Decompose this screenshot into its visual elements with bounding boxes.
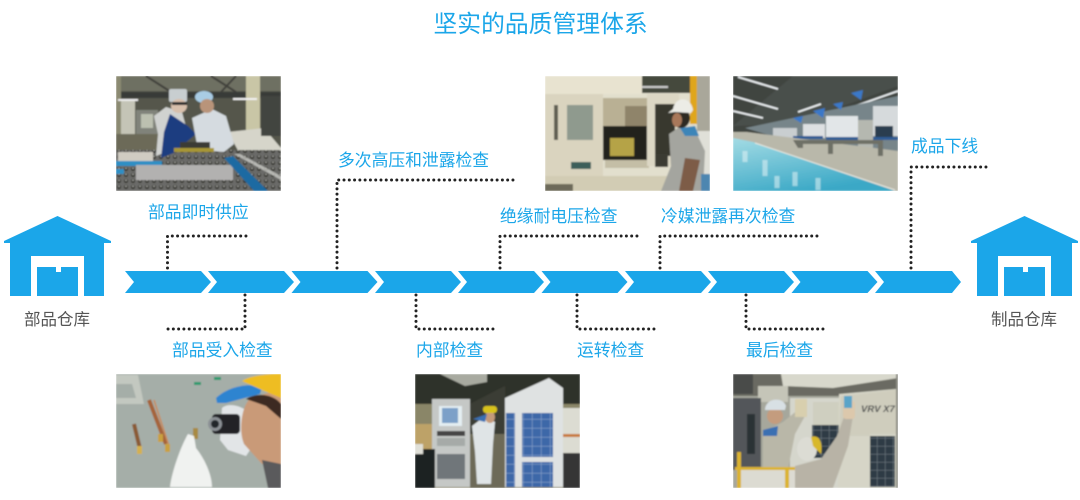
label: finished goods warehouse: 制品仓库 (991, 310, 1057, 329)
photo: production line (733, 76, 898, 191)
connector: finished product (911, 167, 986, 268)
connector: insulation voltage inspection (500, 236, 637, 268)
connector: parts incoming inspection (168, 295, 245, 329)
connector: parts supply (168, 236, 246, 268)
label: final inspection: 最后检查 (746, 341, 813, 360)
connector: internal inspection (416, 295, 493, 329)
icon: parts warehouse (4, 216, 111, 296)
label: running inspection: 运转检查 (577, 341, 644, 360)
label: insulation voltage inspection: 绝缘耐电压检查 (500, 207, 618, 226)
process arrow chain (125, 271, 961, 293)
label: parts warehouse: 部品仓库 (24, 310, 90, 329)
connector: running inspection (577, 295, 654, 329)
title: 坚实的品质管理体系 (434, 11, 648, 38)
label: parts incoming inspection: 部品受入检查 (172, 341, 273, 360)
photo: parts inspection (116, 374, 281, 488)
icon: finished goods warehouse (971, 216, 1078, 296)
label: parts supply: 部品即时供应 (148, 203, 249, 222)
connector: final inspection (746, 295, 823, 329)
label: refrigerant leak re-inspection: 冷媒泄露再次检查 (661, 207, 795, 226)
connector: high pressure and leak inspection (337, 180, 513, 268)
label: high pressure and leak inspection: 多次高压和泄露检查 (338, 151, 489, 170)
label: finished product off the line: 成品下线 (911, 137, 978, 156)
label: internal inspection: 内部检查 (416, 341, 483, 360)
photo: final inspection (733, 374, 898, 488)
photo: final inspection: VRV X7 (861, 404, 896, 415)
photo: machine operator (545, 76, 710, 191)
photo: internal inspection (415, 374, 580, 488)
connector: refrigerant leak re-inspection (660, 236, 817, 268)
photo: parts supply workers (116, 76, 281, 191)
